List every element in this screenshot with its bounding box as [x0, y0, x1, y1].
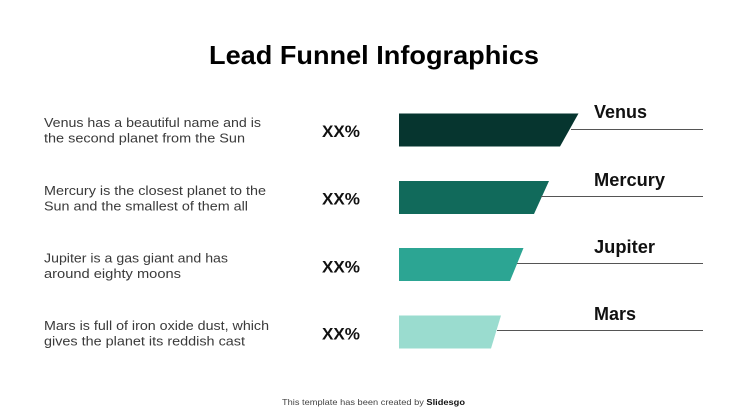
percentage: Venus: XX%	[322, 122, 360, 141]
label: Mars: Mars	[594, 304, 636, 324]
funnel bar: Mercury	[399, 181, 549, 214]
title: Lead Funnel Infographics	[209, 40, 539, 70]
description: Mercury: Sun and the smallest of them all	[44, 198, 248, 214]
percentage: Jupiter: XX%	[322, 258, 360, 276]
funnel bar: Mars	[399, 316, 501, 348]
footer credit: This template has been created by Slidesgo	[282, 397, 465, 407]
description: Jupiter: Jupiter is a gas giant and has	[44, 250, 229, 266]
description: Mars: Mars is full of iron oxide dust, which	[44, 318, 269, 333]
description: Mercury: Mercury is the closest planet to the	[44, 183, 266, 198]
description: Venus	[44, 115, 262, 146]
leader line: Mercury	[541, 196, 703, 198]
description: Mars	[44, 318, 269, 348]
description: Venus: the second planet from the Sun	[44, 130, 245, 146]
row: Venus	[44, 102, 703, 146]
description: Jupiter: around eighty moons	[44, 266, 182, 281]
description: Mercury	[44, 183, 266, 214]
leader line: Jupiter	[517, 262, 703, 264]
label: Venus: Venus	[594, 102, 647, 122]
percentage: Mars: XX%	[322, 324, 360, 344]
row: Jupiter	[44, 237, 703, 281]
percentage: Mercury: XX%	[322, 190, 360, 208]
description: Jupiter	[44, 250, 229, 281]
leader line: Mars	[497, 330, 703, 332]
funnel bar: Venus	[399, 114, 578, 146]
label: Jupiter: Jupiter	[594, 237, 655, 257]
description: Venus: Venus has a beautiful name and is	[44, 115, 262, 130]
leader line: Venus	[571, 128, 703, 130]
row: Mars	[44, 304, 703, 348]
row: Mercury	[44, 170, 703, 214]
funnel bar: Jupiter	[399, 248, 524, 281]
label: Mercury: Mercury	[594, 170, 665, 190]
description: Mars: gives the planet its reddish cast	[44, 334, 245, 348]
